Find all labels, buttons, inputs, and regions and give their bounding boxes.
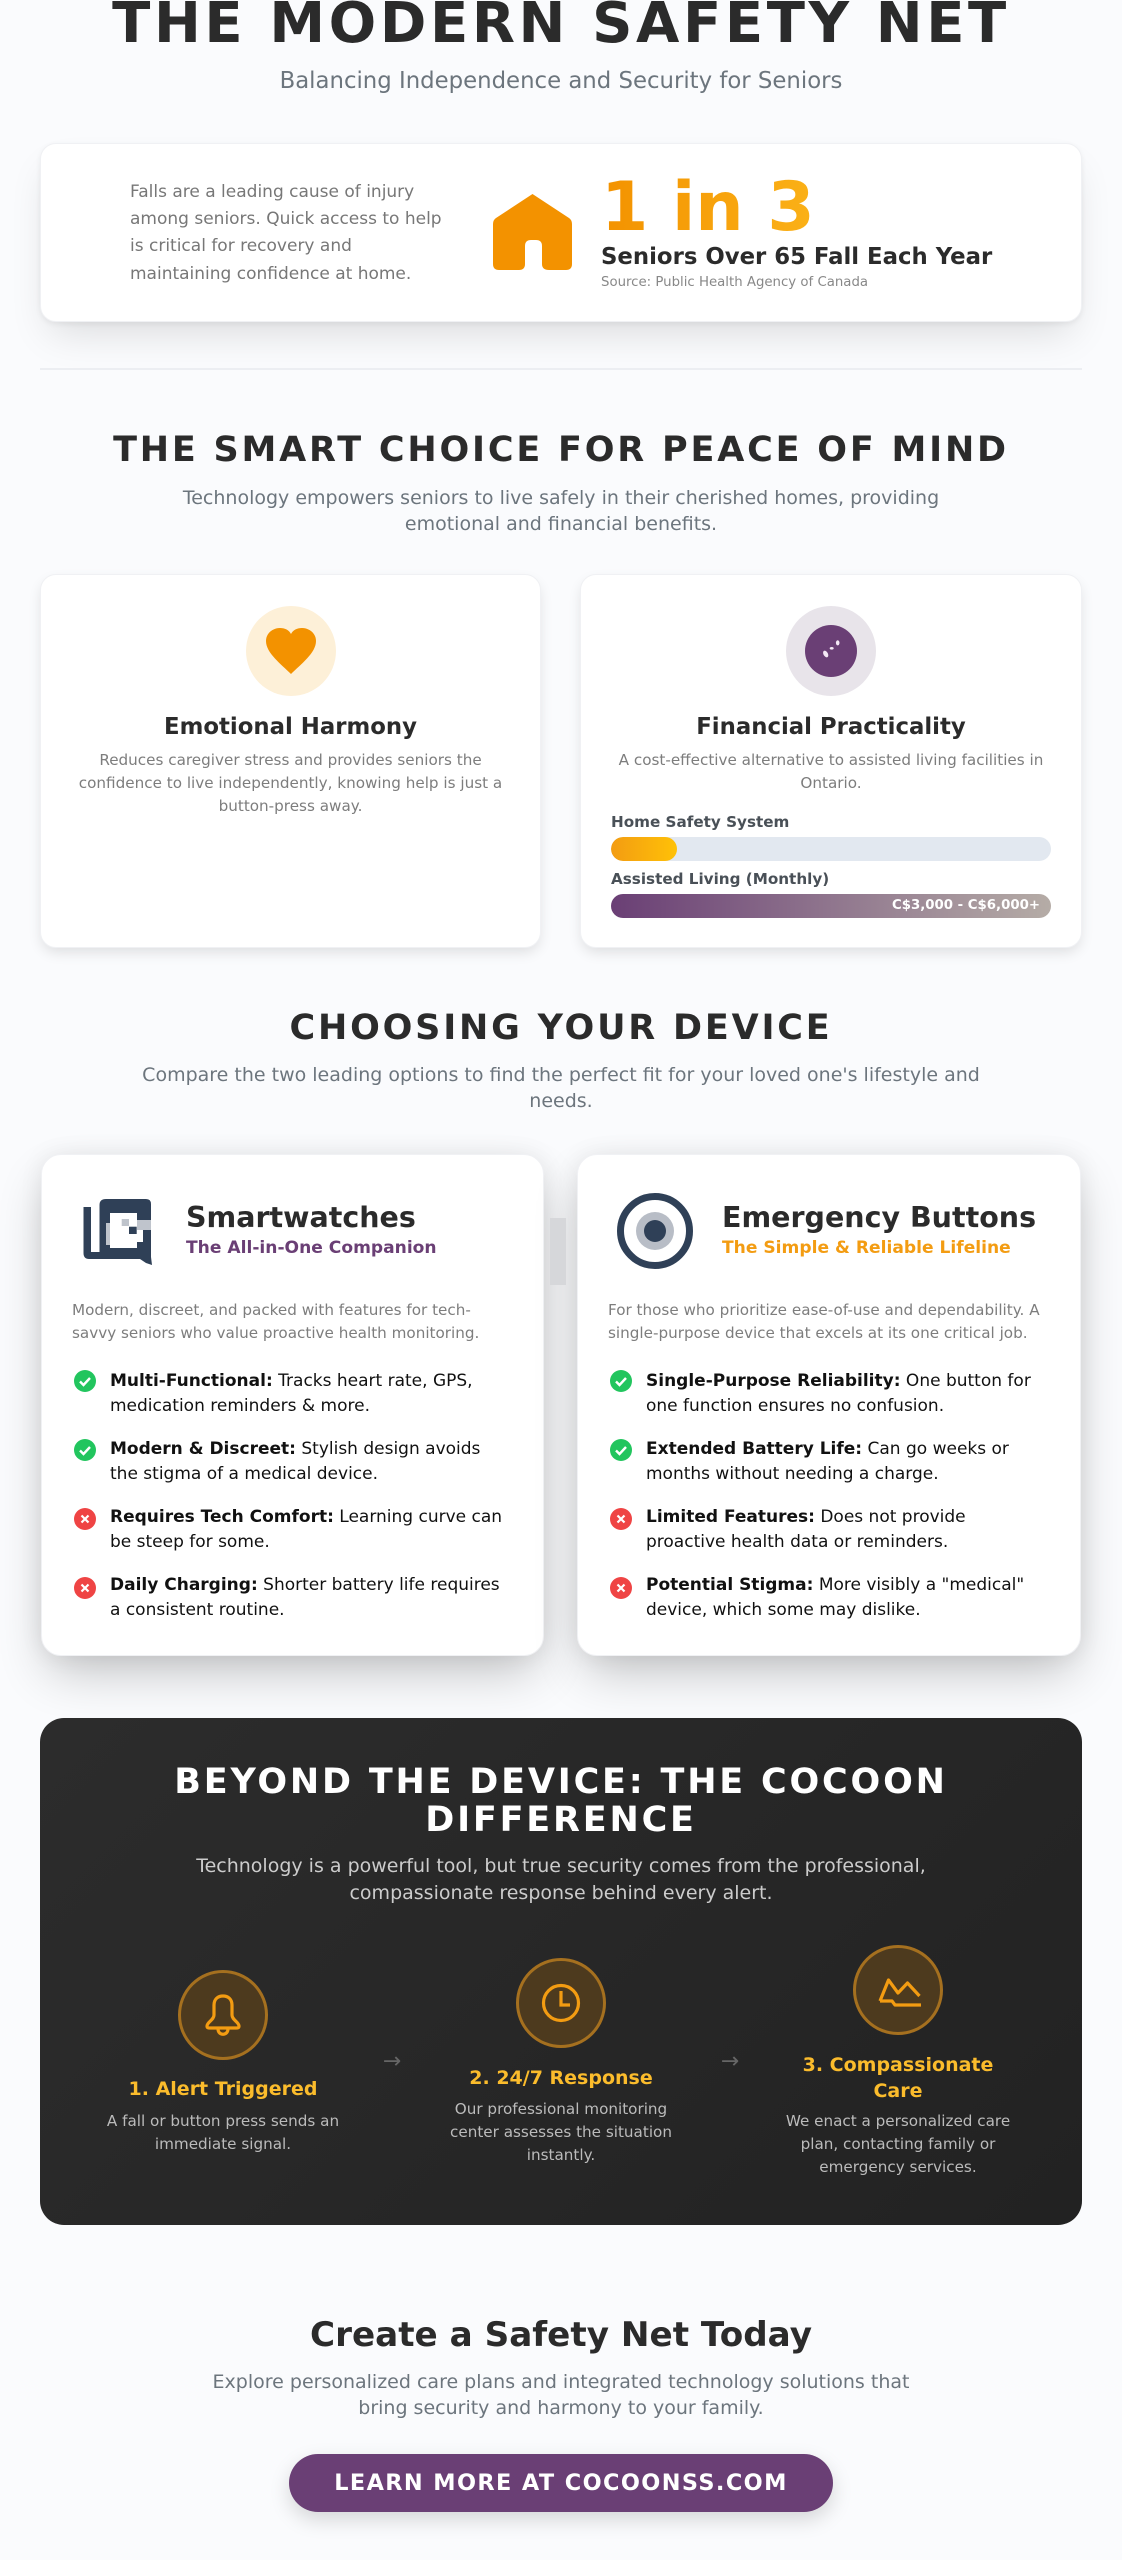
text: button-press away. [219, 797, 362, 815]
text [786, 2112, 1010, 2176]
button: learn more [289, 2454, 833, 2512]
con: limited features [610, 1506, 966, 1552]
con: tech comfort [74, 1506, 502, 1552]
heading: 2. 24/7 Response [469, 2067, 653, 2089]
text: smart choice intro: Technology empowers seniors to live safely in their cherished homes, providing [183, 486, 939, 508]
panel: smartwatches [41, 1154, 544, 1656]
text: smart choice intro [182, 486, 939, 535]
subheading: The All-in-One Companion [186, 1238, 437, 1258]
text: intro [196, 1855, 926, 1904]
step 3 [786, 1945, 1010, 2176]
pro: battery life: Extended Battery Life: Can go weeks or [646, 1438, 1009, 1458]
con: tech comfort: be steep for some. [110, 1532, 270, 1552]
bar: assisted living: C$3,000 - C$6,000+ [892, 898, 1040, 912]
panel: fall statistic [40, 143, 1082, 322]
panel: cocoon difference [40, 1718, 1082, 2225]
con: tech comfort: Requires Tech Comfort: Learning curve can [110, 1506, 502, 1526]
bar label: assisted living: Assisted Living (Monthly) [611, 870, 829, 888]
text: A fall or button press sends an [107, 2112, 339, 2130]
text: description: single-purpose device that excels at its one critical job. [608, 1324, 1028, 1342]
panel: financial practicality [580, 574, 1082, 948]
pro: battery life [610, 1438, 1009, 1484]
heading: Emergency Buttons [722, 1200, 1036, 1234]
pro: multi-functional: Multi-Functional: Tracks heart rate, GPS, [110, 1370, 473, 1390]
step 2 [450, 1958, 672, 2164]
con: daily charging: a consistent routine. [110, 1600, 285, 1620]
feature list [610, 1370, 1031, 1620]
subheading: The Simple & Reliable Lifeline [722, 1238, 1011, 1258]
pro: modern and discreet: Modern & Discreet: Stylish design avoids [110, 1438, 480, 1458]
icon: care hands [853, 1945, 943, 2035]
pro: modern and discreet: the stigma of a medical device. [110, 1464, 378, 1484]
con: potential stigma: Potential Stigma: More visibly a "medical" [646, 1574, 1024, 1594]
pro: reliability: Single-Purpose Reliability: One button for [646, 1370, 1031, 1390]
text: description: Modern, discreet, and packed with features for tech- [72, 1300, 471, 1318]
heading: Emotional Harmony [164, 714, 417, 740]
text: falls intro: maintaining confidence at home. [130, 264, 411, 284]
heading: choosing device: CHOOSING YOUR DEVICE [290, 1008, 832, 1048]
text: choosing intro [142, 1064, 980, 1112]
text: Reduces caregiver stress and provides seniors the [99, 751, 482, 769]
arrow: → [721, 2049, 739, 2074]
pro: reliability: one function ensures no confusion. [646, 1396, 944, 1416]
text: call to action: Explore personalized care plans and integrated technology solutions that [213, 2370, 909, 2392]
heading [803, 2054, 993, 2102]
con: daily charging: Daily Charging: Shorter battery life requires [110, 1574, 500, 1594]
icon: heart [246, 606, 336, 696]
icon: smartwatch [84, 1199, 152, 1265]
text [107, 2112, 339, 2153]
text: choosing intro: Compare the two leading options to find the perfect fit for your loved one's lifestyle and [142, 1064, 980, 1086]
text: intro: compassionate response behind every alert. [349, 1882, 773, 1904]
heading: 1. Alert Triggered [129, 2078, 317, 2100]
panel: emotional harmony [40, 574, 541, 948]
text: description [72, 1300, 479, 1342]
heading: DIFFERENCE [425, 1800, 697, 1840]
text: A cost-effective alternative to assisted living facilities in [619, 751, 1043, 769]
heading: Smartwatches [186, 1200, 416, 1234]
icon: emergency button [617, 1193, 693, 1269]
text: emergency services. [819, 2158, 977, 2176]
heading: call to action: Create a Safety Net Today [310, 2315, 812, 2355]
feature list [74, 1370, 502, 1620]
text: falls intro: is critical for recovery and [130, 236, 352, 256]
statistic label: Seniors Over 65 Fall Each Year [601, 244, 992, 270]
statistic: 1 in 3: 1 in 3 [601, 168, 815, 247]
text: center assesses the situation [450, 2123, 672, 2141]
heading: smart choice: THE SMART CHOICE FOR PEACE OF MIND [113, 430, 1009, 470]
bar: home safety [611, 837, 1051, 861]
text: falls intro: among seniors. Quick access to help [130, 209, 442, 229]
con: limited features: Limited Features: Does not provide [646, 1506, 966, 1526]
text [450, 2100, 672, 2164]
pro: modern and discreet [74, 1438, 480, 1484]
text [618, 751, 1043, 792]
con: daily charging [74, 1574, 500, 1620]
step 1 [107, 1970, 339, 2153]
text: call to action: bring security and harmony to your family. [358, 2397, 764, 2419]
text: instantly. [527, 2146, 595, 2164]
bar label: home safety: Home Safety System [611, 812, 789, 830]
text: description: For those who prioritize ease-of-use and dependability. A [608, 1300, 1040, 1318]
text: Ontario. [800, 774, 862, 792]
heading: Financial Practicality [696, 714, 966, 740]
text: confidence to live independently, knowing help is just a [79, 774, 502, 792]
text: call to action [213, 2370, 909, 2419]
con: potential stigma: device, which some may dislike. [646, 1600, 921, 1620]
text: intro: Technology is a powerful tool, but true security comes from the professional, [196, 1855, 926, 1877]
subtitle: Balancing Independence and Security for Seniors [280, 68, 842, 94]
bar: assisted living [611, 894, 1051, 918]
heading: Care [873, 2080, 923, 2102]
text: choosing intro: needs. [529, 1090, 593, 1112]
text: description: savvy seniors who value proactive health monitoring. [72, 1324, 479, 1342]
text: falls intro [130, 182, 442, 284]
text: description [608, 1300, 1040, 1342]
heading [174, 1762, 948, 1840]
panel: emergency buttons [577, 1154, 1081, 1656]
icon: house [493, 194, 572, 270]
pro: battery life: months without needing a charge. [646, 1464, 939, 1484]
icon: bell [178, 1970, 268, 2060]
text: smart choice intro: emotional and financial benefits. [405, 513, 717, 535]
icon: coin [786, 606, 876, 696]
badge: obscured block between device cards [550, 1218, 566, 1285]
con: limited features: proactive health data or reminders. [646, 1532, 948, 1552]
text: We enact a personalized care [786, 2112, 1010, 2130]
text: plan, contacting family or [801, 2135, 995, 2153]
pro: multi-functional: medication reminders & more. [110, 1396, 370, 1416]
text: Our professional monitoring [455, 2100, 667, 2118]
con: potential stigma [610, 1574, 1024, 1620]
heading: 3. Compassionate [803, 2054, 993, 2076]
source: Source: Public Health Agency of Canada [601, 275, 868, 290]
text [79, 751, 502, 815]
pro: reliability [610, 1370, 1031, 1416]
text: falls intro: Falls are a leading cause of injury [130, 182, 414, 202]
text: immediate signal. [155, 2135, 291, 2153]
pro: multi-functional [74, 1370, 473, 1416]
arrow: → [383, 2049, 401, 2074]
heading: BEYOND THE DEVICE: THE COCOON [174, 1762, 948, 1802]
button: learn more: LEARN MORE AT COCOONSS.COM [334, 2470, 788, 2496]
icon: clock [516, 1958, 606, 2048]
